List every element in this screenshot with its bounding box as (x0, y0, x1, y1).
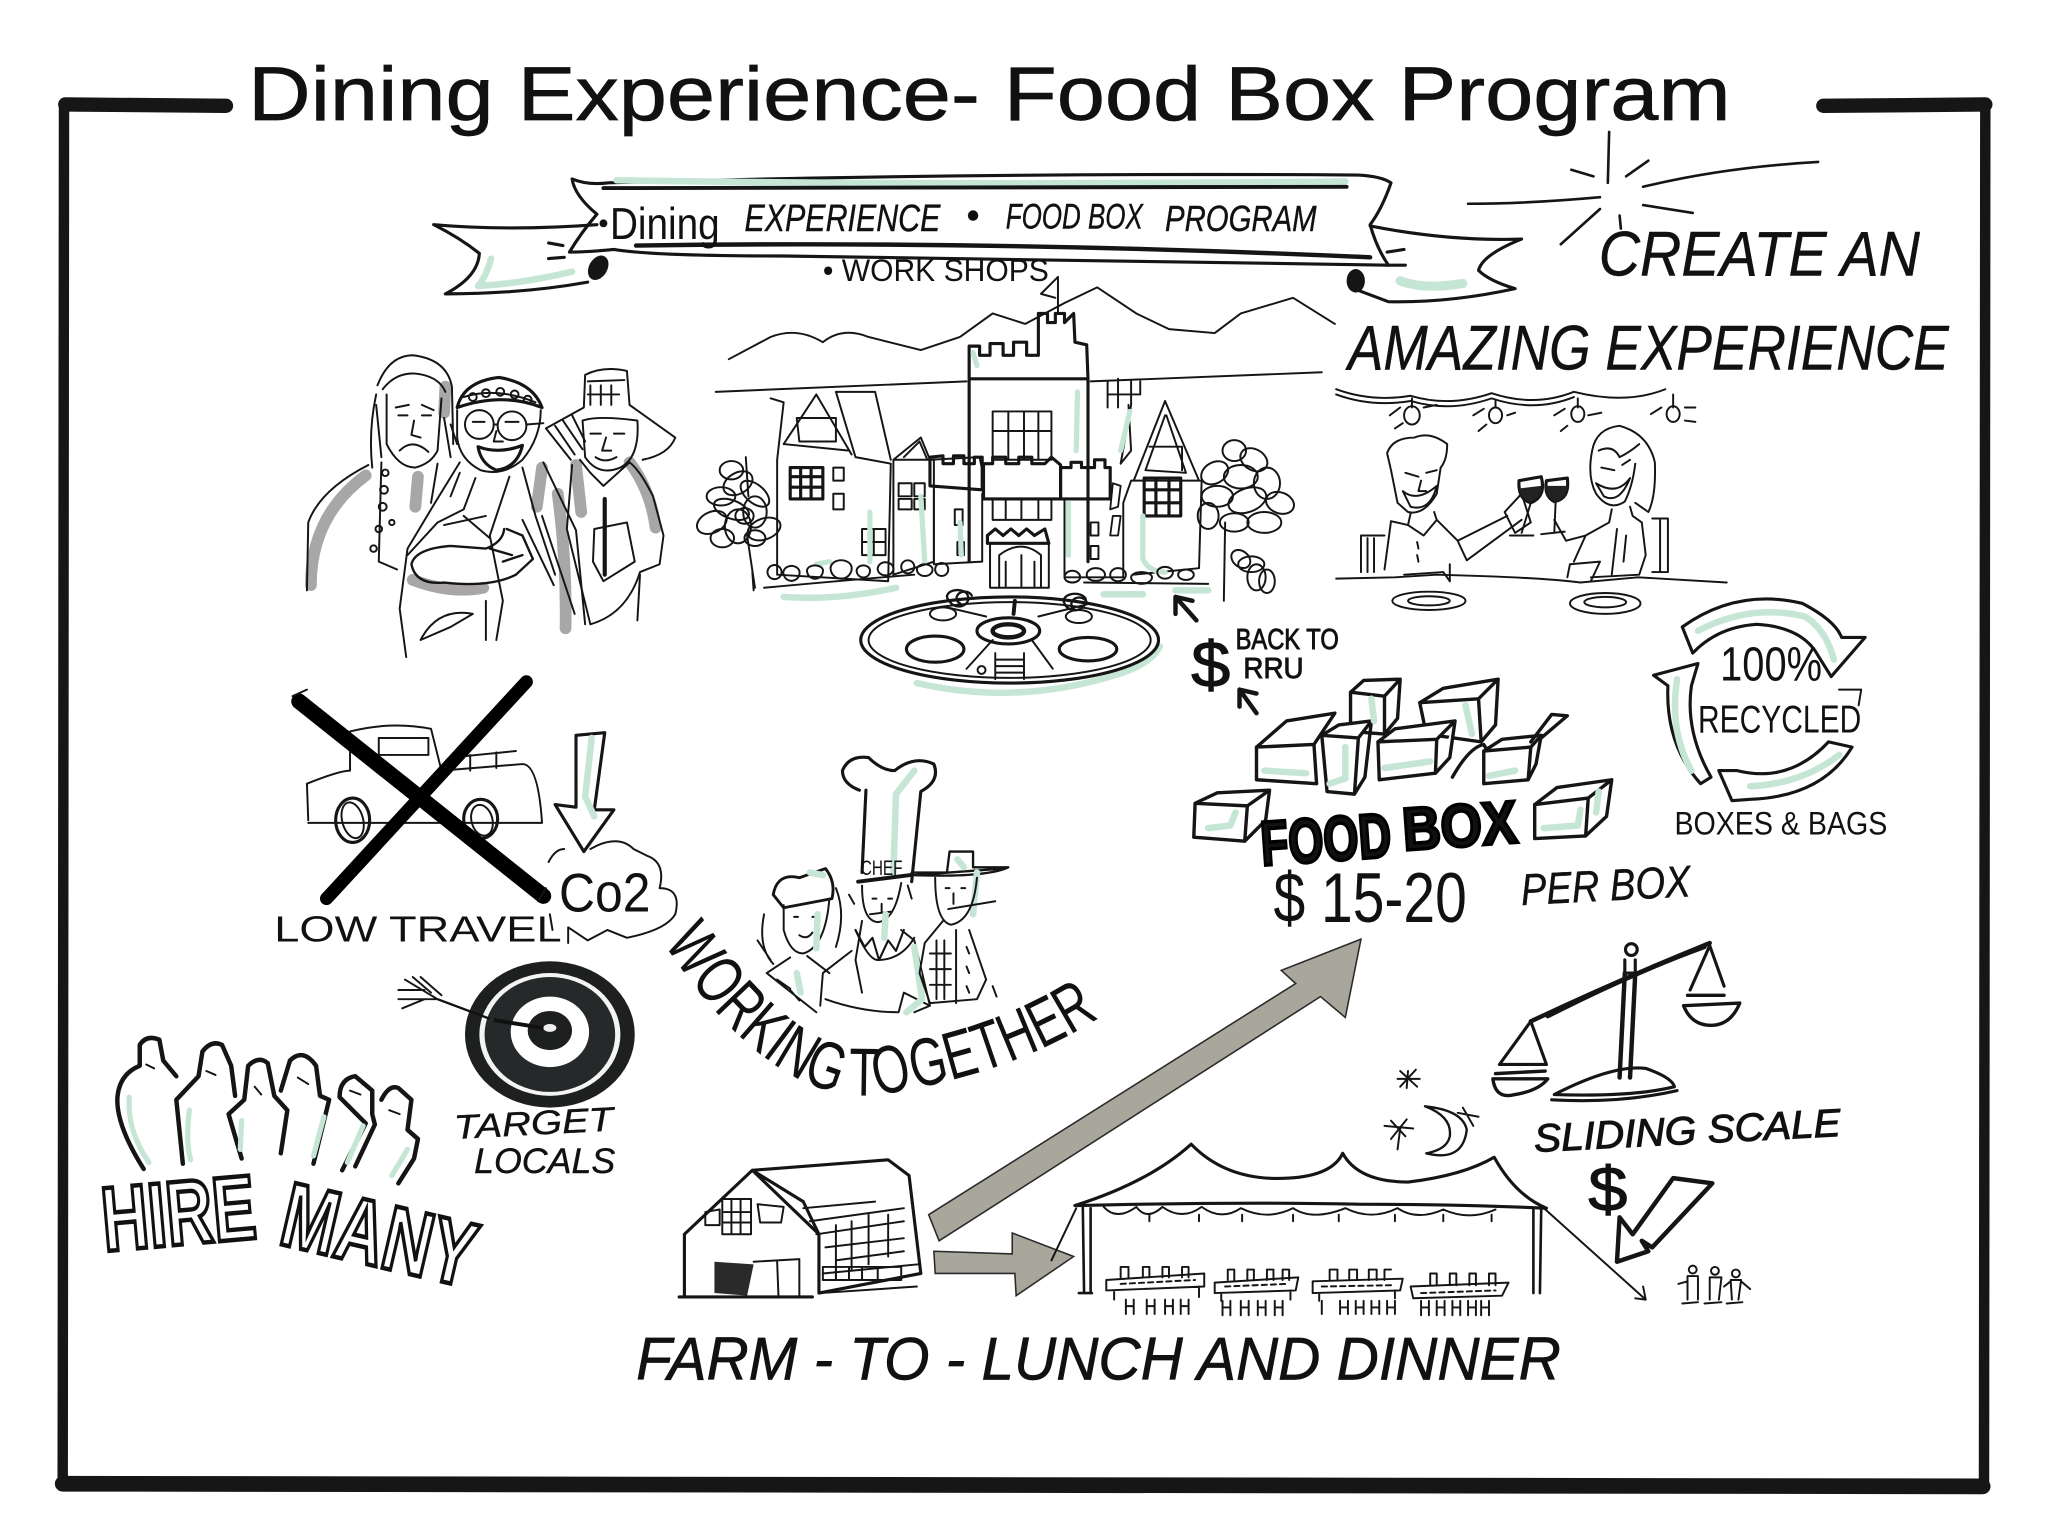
right wing (1061, 460, 1110, 499)
illustration: working together team (758, 757, 1008, 1012)
icon: co2 cloud (549, 841, 677, 943)
arrow to tent (934, 1233, 1074, 1296)
banner (434, 174, 1522, 302)
box cluster (1194, 679, 1612, 841)
icon: recycle loop (1654, 599, 1865, 801)
shrubs (767, 560, 1194, 584)
ground line (752, 572, 1208, 590)
callout: money back to RRU (1176, 597, 1339, 713)
low travel text: LOW TRAVEL (274, 909, 562, 950)
green box shading (1208, 699, 1599, 828)
working together text: WORKING TOGETHER (669, 916, 1098, 1096)
farm to lunch and dinner text: FARM - TO - LUNCH AND DINNER (636, 1325, 1561, 1392)
banner left tail (434, 225, 597, 294)
icon: sparkle burst (1468, 132, 1818, 244)
towers (969, 313, 1088, 562)
illustration: three elders (307, 355, 675, 657)
string lights (1336, 389, 1665, 406)
icon: down arrow to CO2 (555, 733, 614, 852)
center elder (457, 377, 542, 408)
illustration: hire many people (97, 1038, 486, 1307)
icon: food boxes (1194, 679, 1612, 879)
icon: recycle loop: 100% (1720, 637, 1822, 691)
icon: crossed-out truck (293, 682, 546, 901)
price text: PER BOX (1520, 857, 1693, 915)
price text (1273, 857, 1693, 937)
gate block (984, 457, 1061, 499)
down-left arrow (1617, 1178, 1712, 1262)
tiny people group (1678, 1266, 1750, 1304)
callout: money back to RRU: $ (1191, 628, 1230, 701)
icon: target (398, 961, 635, 1108)
illustration: working together team: CHEF (861, 857, 903, 880)
fountain (861, 590, 1159, 683)
man (1361, 435, 1522, 581)
tent posts (1079, 1206, 1541, 1293)
banner: FOOD BOX (1006, 198, 1144, 237)
price text: $ 15-20 (1273, 858, 1467, 937)
horizon (716, 372, 1322, 392)
right elder with hat (546, 369, 675, 460)
food box heavy label (1258, 788, 1520, 879)
right person with cowboy hat (912, 852, 1008, 876)
woman (1554, 426, 1668, 581)
hire many outlined text: HIRE (97, 1156, 260, 1271)
left person (773, 869, 833, 908)
banner end knots (584, 252, 613, 284)
create an text: CREATE AN (1599, 220, 1921, 290)
gray shading (311, 387, 656, 628)
banner body (569, 174, 1391, 265)
icon: recycle loop: RECYCLED (1698, 699, 1861, 742)
center left tower (893, 438, 982, 575)
chef hat (842, 757, 936, 882)
chef (858, 875, 910, 882)
banner: Dining (610, 200, 720, 249)
mountains (729, 287, 1335, 359)
table (1336, 575, 1727, 583)
big arrow up to food box (929, 939, 1361, 1241)
target locals text: TARGET (453, 1101, 617, 1147)
target arrow (438, 999, 490, 1019)
left elder (307, 355, 453, 590)
banner: EXPERIENCE (744, 198, 941, 240)
sliding scale text: SLIDING SCALE (1533, 1102, 1843, 1161)
left wing (771, 392, 891, 581)
tables and chairs (1106, 1267, 1509, 1315)
banner: PROGRAM (1165, 198, 1317, 239)
right tree (1197, 440, 1297, 601)
banner right tail (1357, 226, 1522, 302)
illustration: moon and stars (1384, 1070, 1479, 1155)
hire many outlined text: MANY (272, 1164, 486, 1307)
food box heavy label: BOX (1400, 788, 1519, 863)
title: Dining Experience- Food Box Program (248, 52, 1731, 137)
workshops text: • WORK SHOPS (823, 253, 1049, 288)
target locals text: LOCALS (474, 1142, 616, 1181)
icon: co2 cloud: Co2 (559, 862, 650, 924)
dollar sign: $ (1588, 1155, 1627, 1225)
banner text (600, 219, 607, 227)
illustration: toasting couple (1336, 389, 1727, 614)
amazing experience text: AMAZING EXPERIENCE (1345, 314, 1950, 384)
people silhouettes (117, 1038, 418, 1183)
left tree (693, 457, 784, 588)
food box heavy label: FOOD (1258, 800, 1393, 879)
callout: money back to RRU: RRU (1243, 653, 1304, 685)
tent roof (1075, 1144, 1546, 1208)
hire many outlined text (97, 1156, 486, 1307)
callout: money back to RRU: BACK TO (1236, 624, 1339, 656)
illustration: event tent (1051, 1144, 1646, 1315)
green castle shading (816, 353, 1165, 572)
target locals text (453, 1101, 617, 1181)
illustration: castle (693, 277, 1335, 693)
flag (1041, 277, 1058, 313)
icon: balance scale (1493, 943, 1740, 1101)
plates (1392, 592, 1465, 610)
boxes and bags text: BOXES & BAGS (1674, 805, 1887, 842)
illustration: barn (679, 1160, 921, 1297)
wine glasses (1510, 477, 1568, 536)
